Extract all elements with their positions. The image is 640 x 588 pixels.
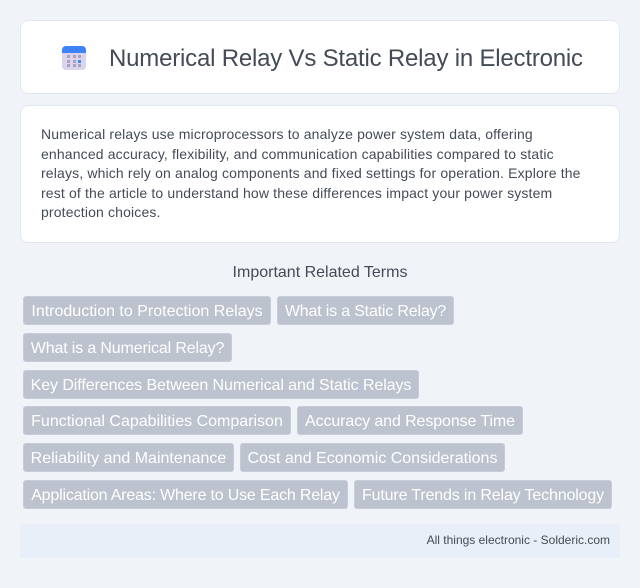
heading: related terms: Important Related Terms: [233, 264, 407, 281]
intro paragraph: enhanced accuracy, flexibility, and communication capabilities compared to static: [41, 146, 554, 162]
intro paragraph: [41, 126, 581, 220]
tag: [23, 296, 271, 325]
panel: header: [20, 20, 620, 94]
tag: Accuracy and Response Time: [305, 413, 515, 430]
intro paragraph: protection choices.: [41, 204, 161, 220]
footer credit: All things electronic - Solderic.com: [427, 533, 610, 547]
tag: Introduction to Protection Relays: [31, 303, 263, 320]
tag: Functional Capabilities Comparison: [31, 413, 283, 430]
icon: calendar: [62, 46, 86, 70]
tag: [23, 480, 348, 509]
footer: [20, 524, 620, 558]
tag: Future Trends in Relay Technology: [362, 487, 604, 504]
tag: [297, 406, 523, 435]
tag: [23, 370, 419, 399]
tag: Reliability and Maintenance: [31, 450, 226, 467]
tag: [23, 406, 291, 435]
tag list: [23, 296, 612, 509]
tag: [277, 296, 454, 325]
tag: What is a Numerical Relay?: [31, 340, 224, 357]
title: Numerical Relay Vs Static Relay in Electronic: [109, 45, 583, 72]
tag: Key Differences Between Numerical and Static Relays: [31, 377, 411, 394]
intro paragraph: Numerical relays use microprocessors to analyze power system data, offering: [41, 126, 533, 142]
tag: What is a Static Relay?: [285, 303, 446, 320]
tag: Cost and Economic Considerations: [248, 450, 497, 467]
intro paragraph: rest of the article to understand how these differences impact your power system: [41, 185, 552, 201]
tag: [23, 333, 232, 362]
tag: Application Areas: Where to Use Each Relay: [31, 487, 340, 504]
tag: [240, 443, 505, 472]
tag: [354, 480, 612, 509]
intro paragraph: relays, which rely on analog components and fixed settings for operation. Explore the: [41, 165, 581, 181]
tag: [23, 443, 234, 472]
panel: intro text: [20, 105, 620, 243]
